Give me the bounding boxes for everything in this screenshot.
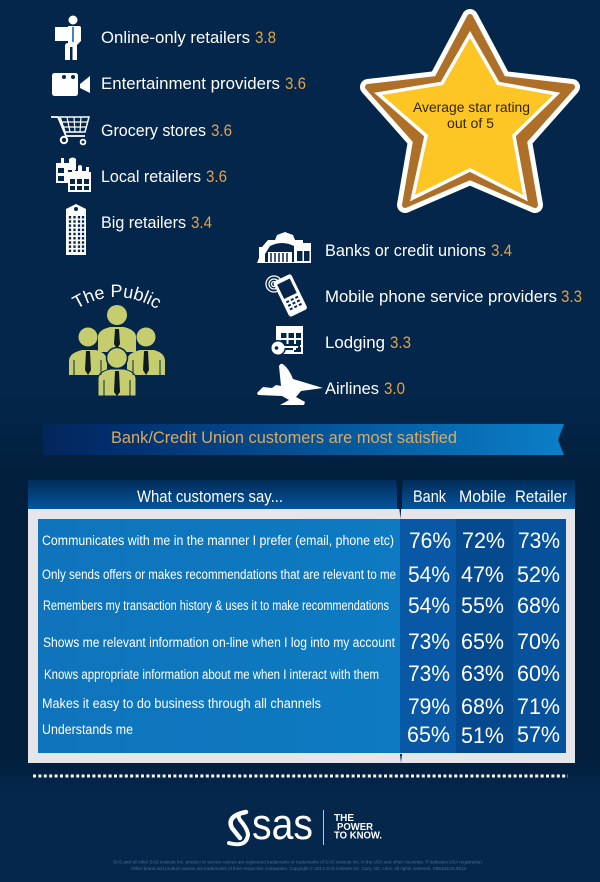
text: grocery stores: Grocery stores	[101, 121, 206, 140]
icon: local retailers, small shops	[56, 158, 91, 192]
text: big retailers: Big retailers	[101, 213, 186, 232]
column: bank percentages: 73%	[408, 629, 450, 654]
ribbon: bank/credit union customers are most satisfied	[43, 424, 564, 455]
column: retailer percentages: 57%	[517, 722, 560, 747]
column: mobile percentages: 55%	[461, 593, 504, 618]
text: entertainment providers: Entertainment providers	[101, 74, 280, 93]
column: bank percentages	[400, 519, 456, 753]
text: big retailers: 3.4	[191, 213, 212, 232]
text: banks: Banks or credit unions	[325, 241, 486, 260]
text: local retailers: 3.6	[206, 167, 227, 186]
text: online-only retailers: Online-only retailers	[101, 28, 250, 47]
icon: big retailers, tower	[66, 204, 86, 255]
icon: grocery cart	[51, 117, 89, 144]
column: mobile percentages	[456, 519, 513, 753]
star caption: Average star rating	[413, 100, 530, 115]
table header: columns	[402, 480, 575, 509]
text: local retailers: Local retailers	[101, 167, 201, 186]
table header: columns: Mobile	[459, 488, 506, 506]
statement labels: Only sends offers or makes recommendations that are relevant to me	[42, 567, 396, 582]
column: bank percentages: 79%	[408, 694, 450, 719]
column: retailer percentages: 52%	[517, 562, 560, 587]
table header: what customers say: What customers say...	[137, 487, 283, 506]
icon: mobile phone	[266, 274, 308, 317]
column: mobile percentages: 65%	[461, 629, 504, 654]
legal footnote: SAS and all other SAS Institute Inc. product or service names are registered trademarks or trademarks of SAS Institute Inc. in the USA and other countries. ® indicates USA registration.	[113, 858, 483, 866]
logo tagline	[334, 812, 382, 842]
text: lodging: 3.3	[390, 333, 411, 352]
table header: columns: Bank	[413, 488, 447, 506]
text: online-only retailers: 3.8	[255, 28, 276, 47]
star: average star rating	[368, 17, 572, 205]
text: grocery stores: 3.6	[211, 121, 232, 140]
icon: the public, group of people	[69, 305, 165, 396]
icon: banks, bank building	[257, 232, 311, 263]
statement labels	[38, 519, 400, 753]
ribbon: bank/credit union customers are most satisfied: Bank/Credit Union customers are most satisfied	[111, 429, 457, 447]
column: bank percentages: 73%	[408, 661, 450, 686]
star caption	[413, 100, 530, 131]
text: airlines: 3.0	[384, 379, 405, 398]
icon: airplane	[257, 364, 323, 405]
column: bank percentages: 65%	[407, 722, 450, 747]
logo tagline: POWER	[337, 821, 373, 833]
column: mobile percentages: 63%	[461, 661, 504, 686]
table backing panel	[28, 509, 575, 763]
icon: lodging, building and key	[270, 326, 303, 356]
statement labels: Remembers my transaction history & uses it to make recommendations	[43, 598, 389, 613]
legal footnote	[113, 858, 483, 872]
text: airlines	[325, 379, 405, 398]
statement labels: Communicates with me in the manner I prefer (email, phone etc)	[42, 533, 394, 548]
statement labels: Makes it easy to do business through all channels	[42, 696, 321, 711]
column: bank percentages: 76%	[409, 528, 451, 553]
logo: sas, the power to know	[229, 800, 382, 849]
table header: what customers say	[28, 480, 397, 509]
logo tagline: TO KNOW.	[334, 830, 382, 842]
text: lodging: Lodging	[325, 333, 385, 352]
logo tagline: THE	[334, 812, 354, 824]
heading: the public, curved	[71, 284, 160, 308]
text: banks: 3.4	[491, 241, 512, 260]
column: retailer percentages: 71%	[517, 694, 560, 719]
column: bank percentages: 54%	[408, 562, 450, 587]
text: mobile phone service providers: Mobile phone service providers	[325, 287, 557, 306]
text: mobile phone service providers: 3.3	[561, 287, 582, 306]
logo wordmark: sas	[252, 800, 313, 849]
text: airlines: Airlines	[325, 379, 379, 398]
statement labels: Understands me	[42, 722, 133, 737]
column: bank percentages: 54%	[408, 593, 450, 618]
column: mobile percentages: 68%	[461, 694, 504, 719]
column: retailer percentages: 73%	[518, 528, 560, 553]
column: retailer percentages: 68%	[517, 593, 560, 618]
icon: online-only retailers, person with parcel	[55, 16, 81, 60]
column: mobile percentages: 51%	[461, 723, 504, 748]
table: what customers say	[28, 480, 575, 763]
logo swirl	[229, 812, 248, 844]
legal footnote: Other brand and product names are trademarks of their respective companies. Copyright © 2013 SAS Institute Inc. Cary, NC, USA. All rights reserved. S95181US.0613	[131, 865, 466, 872]
icon: entertainment, video camera	[52, 73, 90, 96]
text: entertainment providers: 3.6	[285, 74, 306, 93]
statement labels: Knows appropriate information about me when I interact with them	[44, 667, 379, 682]
column: mobile percentages: 47%	[461, 562, 504, 587]
column: retailer percentages: 60%	[517, 661, 560, 686]
star caption: out of 5	[447, 116, 494, 131]
column: mobile percentages: 72%	[462, 528, 505, 553]
heading: the public, curved: The Public	[71, 284, 160, 308]
table header: columns: Retailer	[515, 488, 567, 506]
statement labels: Shows me relevant information on-line when I log into my account	[43, 635, 395, 650]
column: retailer percentages: 70%	[517, 629, 560, 654]
column: retailer percentages	[513, 519, 566, 753]
